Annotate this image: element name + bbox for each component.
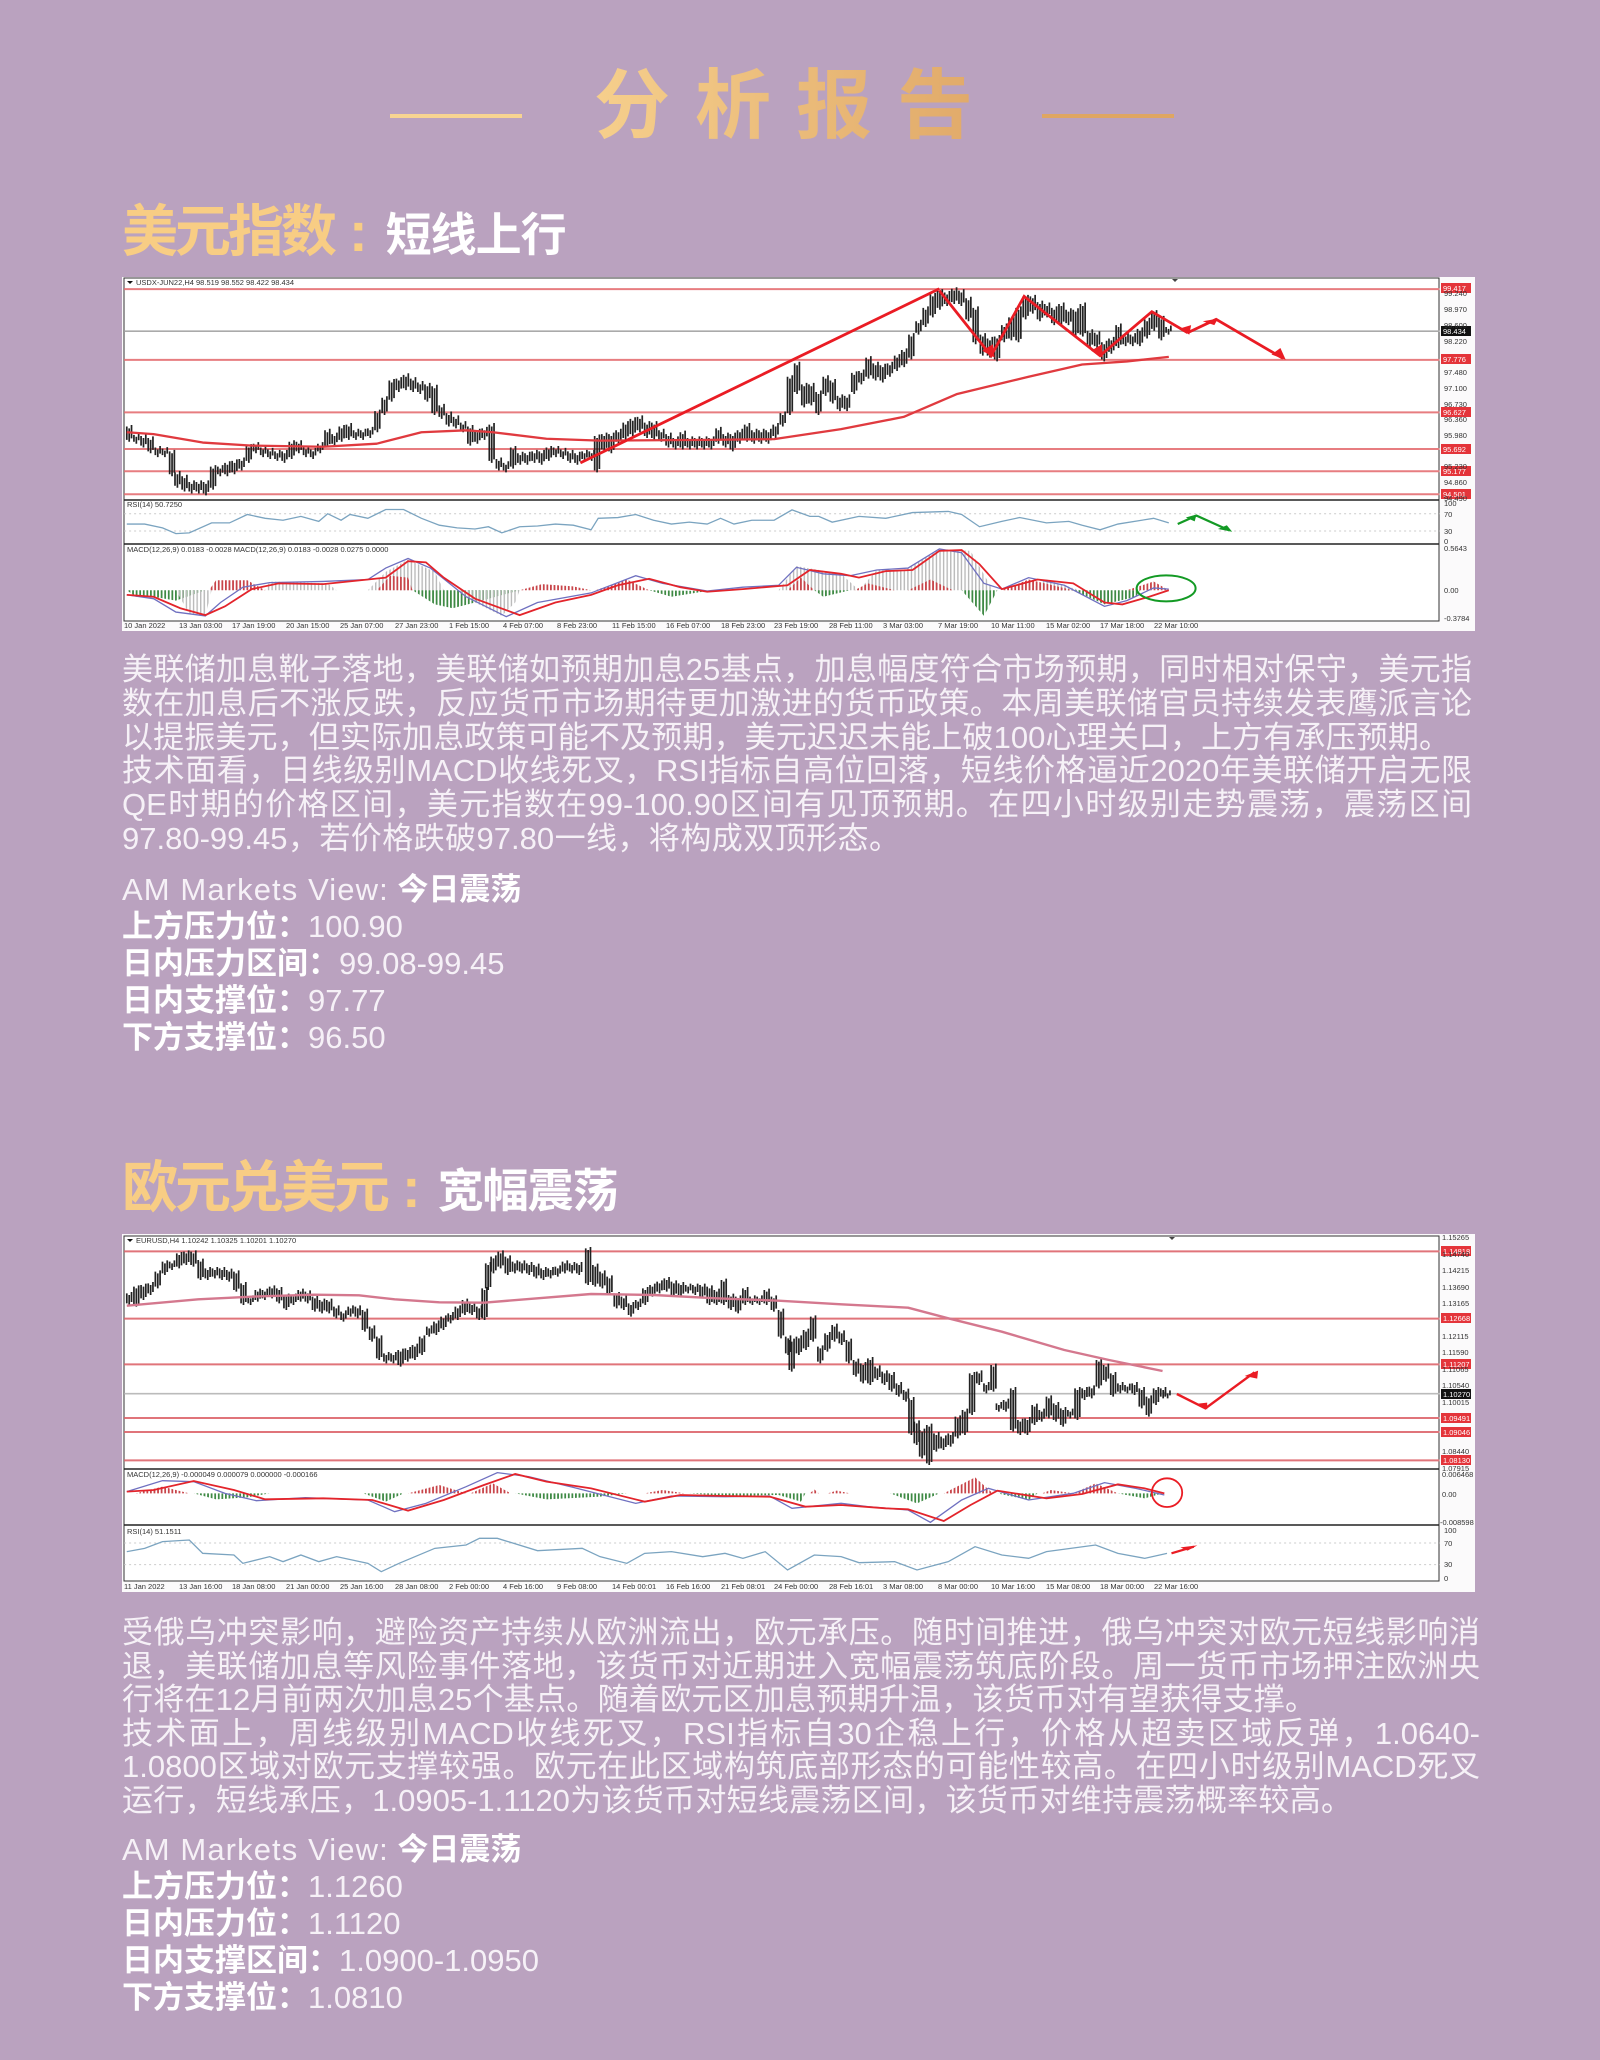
date axis: 3 Mar 08:00	[883, 1582, 923, 1591]
price tags: 70	[1444, 510, 1452, 519]
heading: EURUSD: 欧元兑美元 : 宽幅震荡	[122, 1156, 618, 1219]
price tags: 98.970	[1444, 305, 1467, 314]
date axis: 22 Mar 16:00	[1154, 1582, 1198, 1591]
price tags: 1.13690	[1442, 1283, 1469, 1292]
price tags: -0.008598	[1440, 1518, 1474, 1527]
date axis: 24 Feb 00:00	[774, 1582, 818, 1591]
date axis: 4 Feb 16:00	[503, 1582, 543, 1591]
price tags: 1.10540	[1442, 1381, 1469, 1390]
date axis: 10 Mar 11:00	[991, 621, 1035, 630]
MACD	[127, 549, 1169, 616]
text block: USD analysis: 数在加息后不涨反跌，反应货币市场期待更加激进的货币政策。本周美联储官员持续发表鹰派言论	[122, 686, 1472, 721]
date axis: 28 Feb 16:01	[829, 1582, 873, 1591]
date axis: 20 Jan 15:00	[286, 621, 329, 630]
date axis: 16 Feb 16:00	[666, 1582, 710, 1591]
date axis: 22 Mar 10:00	[1154, 621, 1198, 630]
price tags: 1.09491	[1443, 1414, 1470, 1423]
price tags: 0.5643	[1444, 544, 1467, 553]
RSI	[124, 513, 1439, 515]
price tags: 94.490	[1444, 494, 1467, 503]
price tags: 99.240	[1444, 289, 1467, 298]
price tags: 1.14215	[1442, 1266, 1469, 1275]
date axis: 7 Mar 19:00	[938, 621, 978, 630]
price tags: 96.730	[1444, 400, 1467, 409]
date axis: 25 Jan 16:00	[340, 1582, 383, 1591]
chart captions: EURUSD,H4 1.10242 1.10325 1.10201 1.10270	[136, 1236, 296, 1245]
title: 分析报告	[594, 64, 998, 149]
text block: USD analysis: QE时期的价格区间，美元指数在99-100.90区间有见顶预期。在四小时级别走势震荡，震荡区间	[122, 787, 1472, 822]
chart captions	[127, 1236, 318, 1536]
price tags: 94.860	[1444, 478, 1467, 487]
date axis: 21 Feb 08:01	[721, 1582, 765, 1591]
text block: USD analysis: 美联储加息靴子落地，美联储如预期加息25基点，加息幅度符合市场预期，同时相对保守，美元指	[122, 652, 1472, 687]
date axis: 17 Mar 18:00	[1100, 621, 1144, 630]
date axis: 4 Feb 07:00	[503, 621, 543, 630]
price tags: 1.10015	[1442, 1398, 1469, 1407]
date axis: 8 Mar 00:00	[938, 1582, 978, 1591]
price tags: 94.501	[1443, 490, 1466, 499]
date axis: 13 Jan 03:00	[179, 621, 222, 630]
date axis: 17 Jan 19:00	[232, 621, 275, 630]
chart captions	[127, 278, 388, 554]
date axis: 18 Jan 08:00	[232, 1582, 275, 1591]
date axis: 28 Feb 11:00	[829, 621, 873, 630]
price tags: 1.12115	[1442, 1332, 1469, 1341]
price tags: 0.006468	[1442, 1470, 1473, 1479]
key levels: USD: 日内压力区间：99.08-99.45	[122, 946, 504, 981]
price tags: 95.177	[1443, 467, 1466, 476]
price tags: 30	[1444, 1560, 1452, 1569]
price tags: 1.12668	[1443, 1314, 1470, 1323]
RSI	[124, 1542, 1439, 1544]
price tags: 100	[1444, 499, 1457, 508]
price tags: 98.600	[1444, 321, 1467, 330]
price tags: 1.08130	[1443, 1456, 1470, 1465]
price tags: 95.230	[1444, 462, 1467, 471]
chart captions: MACD(12,26,9) 0.0183 -0.0028 MACD(12,26,9) 0.0183 -0.0028 0.0275 0.0000	[127, 545, 388, 554]
date axis: 10 Jan 2022	[124, 621, 165, 630]
date axis: 16 Feb 07:00	[666, 621, 710, 630]
text block: USD analysis: 技术面看，日线级别MACD收线死叉，RSI指标自高位回落，短线价格逼近2020年美联储开启无限	[122, 753, 1472, 788]
chart: EURUSD H4	[122, 1234, 1475, 1592]
date axis: 27 Jan 23:00	[395, 621, 438, 630]
text block: EUR analysis: 退，美联储加息等风险事件落地，该货币对近期进入宽幅震荡筑底阶段。周一货币市场押注欧洲央	[122, 1649, 1480, 1684]
date axis: 11 Jan 2022	[124, 1582, 165, 1591]
price tags: 1.13165	[1442, 1299, 1469, 1308]
key levels: EUR: 日内支撑区间：1.0900-1.0950	[122, 1943, 539, 1978]
price tags: 0.00	[1442, 1490, 1457, 1499]
date axis: 10 Mar 16:00	[991, 1582, 1035, 1591]
text block: USD analysis	[122, 652, 1472, 856]
price tags: 0.00	[1444, 586, 1459, 595]
text block: EUR analysis: 1.0800区域对欧元支撑较强。欧元在此区域构筑底部形态的可能性较高。在四小时级别MACD死叉	[122, 1749, 1480, 1784]
price tags	[1441, 283, 1471, 623]
price tags	[1440, 1233, 1474, 1583]
candlesticks	[127, 287, 1171, 495]
price tags: 96.360	[1444, 415, 1467, 424]
text block: EUR analysis: 行将在12月前两次加息25个基点。随着欧元区加息预期升温，该货币对有望获得支撑。	[122, 1682, 1316, 1717]
chart captions: RSI(14) 51.1511	[127, 1527, 181, 1536]
red trend arrows	[580, 289, 1283, 463]
date axis: 15 Mar 02:00	[1046, 621, 1090, 630]
date axis: 13 Jan 16:00	[179, 1582, 222, 1591]
key levels: EUR: 上方压力位：1.1260	[122, 1869, 403, 1904]
red forecast arrow	[1177, 1372, 1255, 1408]
price tags: 1.11065	[1442, 1365, 1469, 1374]
date axis: 9 Feb 08:00	[557, 1582, 597, 1591]
price tags: 0	[1444, 537, 1448, 546]
date axis: 3 Mar 03:00	[883, 621, 923, 630]
key levels: EUR	[122, 1832, 539, 2015]
chart captions: MACD(12,26,9) -0.000049 0.000079 0.000000 -0.000166	[127, 1470, 318, 1479]
text block: EUR analysis: 受俄乌冲突影响，避险资产持续从欧洲流出，欧元承压。随时间推进，俄乌冲突对欧元短线影响消	[122, 1615, 1480, 1650]
price tags: 1.10270	[1443, 1390, 1470, 1399]
date axis: 23 Feb 19:00	[774, 621, 818, 630]
MACD	[136, 1477, 1163, 1503]
moving average	[127, 1294, 1163, 1371]
price tags: 98.220	[1444, 337, 1467, 346]
date axis: 28 Jan 08:00	[395, 1582, 438, 1591]
title rule left	[390, 114, 522, 118]
price tags: 97.100	[1444, 384, 1467, 393]
date axis: 11 Feb 15:00	[612, 621, 656, 630]
key levels: USD: 下方支撑位：96.50	[122, 1020, 386, 1055]
text block: EUR analysis: 运行，短线承压，1.0905-1.1120为该货币对短线震荡区间，该货币对维持震荡概率较高。	[122, 1783, 1352, 1818]
price tags: 70	[1444, 1539, 1452, 1548]
chart captions: RSI(14) 50.7250	[127, 500, 182, 509]
date axis: 2 Feb 00:00	[449, 1582, 489, 1591]
text block: USD analysis: 97.80-99.45，若价格跌破97.80一线，将构成双顶形态。	[122, 821, 900, 856]
price tags: 100	[1444, 1526, 1457, 1535]
price tags: 97.480	[1444, 368, 1467, 377]
text block: USD analysis: 以提振美元，但实际加息政策可能不及预期，美元迟迟未能上破100心理关口，上方有承压预期。	[122, 720, 1450, 755]
price tags: 1.07915	[1442, 1464, 1469, 1473]
price tags: 97.776	[1443, 355, 1466, 364]
price tags: 1.14740	[1442, 1250, 1469, 1259]
chart captions: USDX-JUN22,H4 98.519 98.552 98.422 98.434	[136, 278, 294, 287]
price tags: 1.11590	[1442, 1348, 1469, 1357]
heading: US dollar index: 美元指数 : 短线上行	[122, 200, 566, 263]
price tags: 1.08440	[1442, 1447, 1469, 1456]
price tags: 1.14818	[1443, 1247, 1470, 1256]
price tags: 98.434	[1443, 327, 1466, 336]
date axis: 14 Feb 00:01	[612, 1582, 656, 1591]
price tags: 95.692	[1443, 445, 1466, 454]
text block: EUR analysis: 技术面上，周线级别MACD收线死叉，RSI指标自30企稳上行，价格从超卖区域反弹，1.0640-	[122, 1716, 1480, 1751]
key levels: USD	[122, 872, 521, 1055]
key levels: USD: AM Markets View: 今日震荡	[122, 872, 521, 907]
date axis: 15 Mar 08:00	[1046, 1582, 1090, 1591]
price tags: 0	[1444, 1574, 1448, 1583]
date axis: 18 Feb 23:00	[721, 621, 765, 630]
date axis: 21 Jan 00:00	[286, 1582, 329, 1591]
key levels: EUR: 下方支撑位：1.0810	[122, 1980, 403, 2015]
title rule right	[1042, 114, 1174, 118]
price tags: 1.11207	[1443, 1360, 1470, 1369]
text block: EUR analysis	[122, 1615, 1480, 1818]
date axis	[124, 621, 1198, 630]
candlesticks	[127, 1247, 1170, 1465]
key levels: EUR: 日内压力位：1.1120	[122, 1906, 401, 1941]
price tags: 95.980	[1444, 431, 1467, 440]
price tags: 99.417	[1443, 284, 1466, 293]
price tags: 30	[1444, 527, 1452, 536]
key levels: USD: 日内支撑位：97.77	[122, 983, 386, 1018]
key levels: EUR: AM Markets View: 今日震荡	[122, 1832, 521, 1867]
chart: USDX H4	[122, 277, 1475, 631]
key levels: USD: 上方压力位：100.90	[122, 909, 403, 944]
date axis: 1 Feb 15:00	[449, 621, 489, 630]
price tags: 96.627	[1443, 408, 1466, 417]
price tags: -0.3784	[1444, 614, 1469, 623]
moving average	[127, 357, 1169, 447]
date axis: 25 Jan 07:00	[340, 621, 383, 630]
date axis: 18 Mar 00:00	[1100, 1582, 1144, 1591]
price tags: 1.09046	[1443, 1428, 1470, 1437]
date axis	[124, 1582, 1198, 1591]
date axis: 8 Feb 23:00	[557, 621, 597, 630]
